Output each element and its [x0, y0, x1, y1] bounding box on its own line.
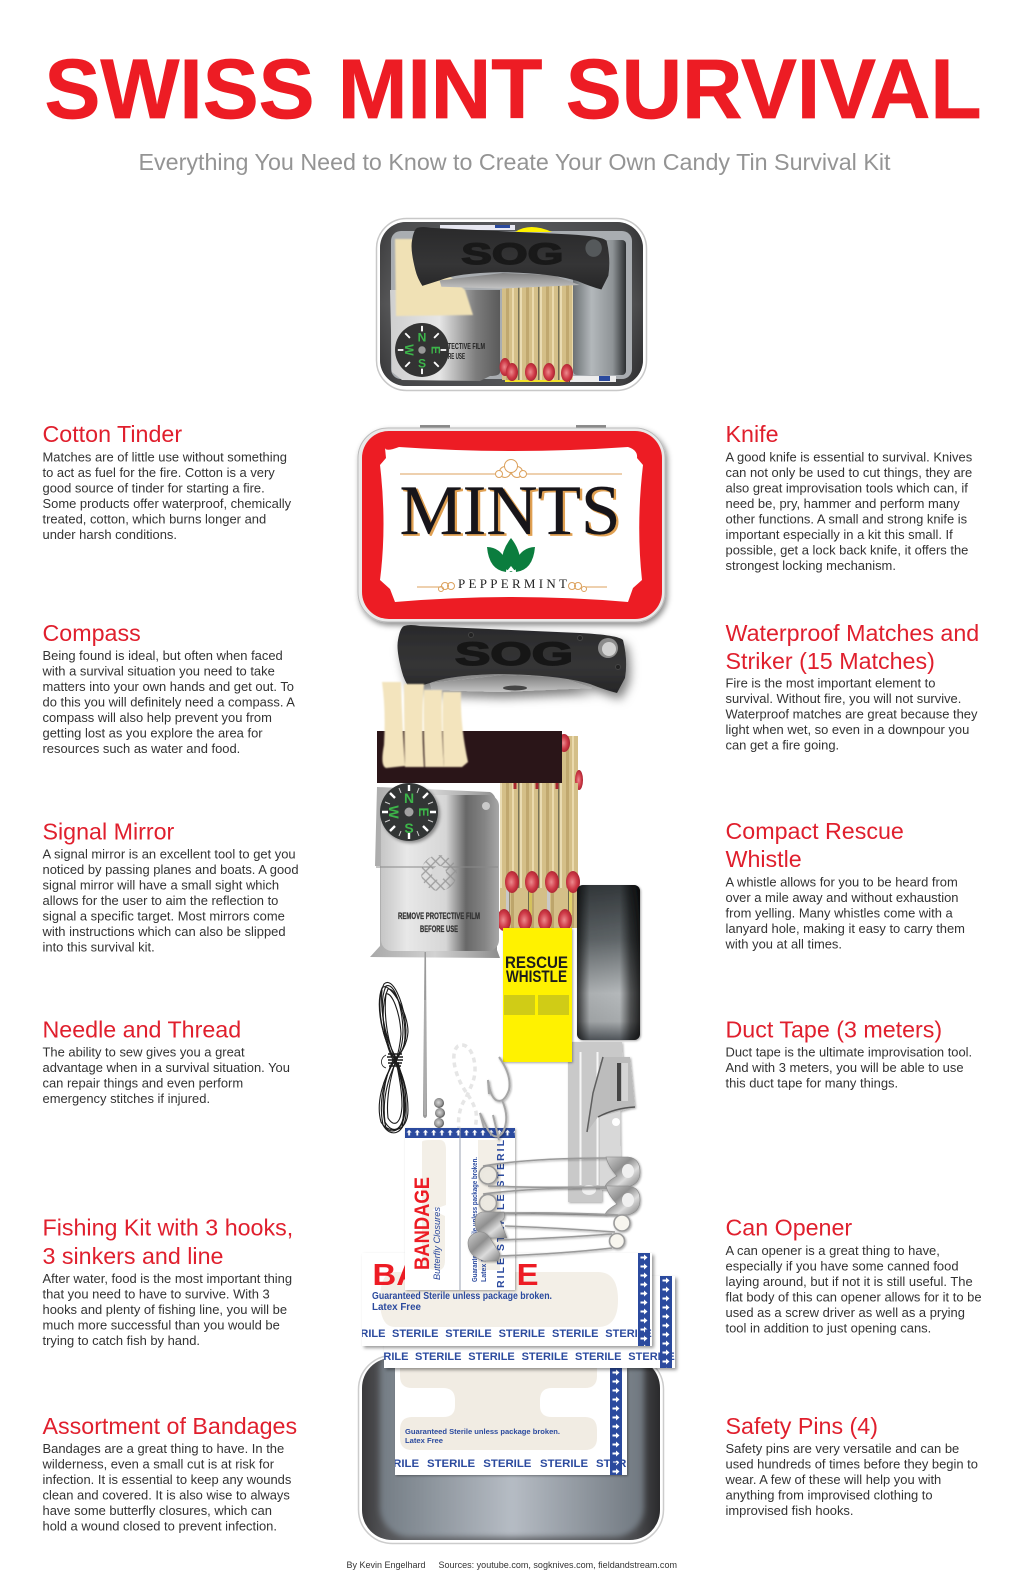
open tin packed with the kit: TECTIVE FILM: [448, 342, 485, 351]
peppermint label: PEPPERMINT: [458, 576, 567, 591]
section: can opener: used as a screw driver as well as a prying: [726, 1305, 965, 1320]
mint leaves: [487, 538, 535, 572]
compass: W: [386, 805, 402, 819]
pin 4: [468, 1232, 624, 1261]
section: knife: need be, pry, hammer and perform many: [726, 496, 960, 511]
second stacked bandage: STERILE: [575, 1351, 621, 1363]
section: signal mirror: A signal mirror is an excellent tool to get you: [42, 846, 296, 861]
section: compact rescue whistle: Whistle: [726, 846, 802, 872]
section: fishing kit: Fishing Kit with 3 hooks,: [42, 1215, 293, 1241]
pin 3: [475, 1212, 630, 1238]
section: cotton tinder: to act as fuel for the fire. Cotton is a very: [42, 465, 275, 480]
pin 1: [479, 1157, 640, 1187]
mints tin lid: [358, 425, 665, 622]
section: assortment of bandages: wilderness, even a small cut is at risk for: [42, 1456, 275, 1472]
section: assortment of bandages: clean and covered. It is also wise to always: [42, 1488, 290, 1502]
butterfly closure bandages, vertical: Guaranteed Sterile unless package broken.: [472, 1157, 479, 1282]
section: duct tape: Duct Tape (3 meters): [726, 1016, 942, 1042]
section: knife: other functions. A small and strong knife is: [726, 512, 967, 527]
section: waterproof matches: survival. Without fire, you will not survive.: [726, 691, 961, 706]
section: signal mirror: allows for the user to aim the reflection to: [42, 893, 278, 908]
section: waterproof matches: [726, 620, 979, 753]
footer credits: By Kevin Engelhard: [346, 1560, 426, 1571]
open folding knife: [398, 625, 626, 693]
section: signal mirror: [42, 818, 299, 954]
footer credits: Sources: youtube.com, sogknives.com, fieldandstream.com: [438, 1560, 677, 1571]
section: can opener: flat body of this can opener allows for it to be: [726, 1290, 982, 1304]
section: knife: can not only be used to cut things, they are: [726, 465, 972, 480]
open tin packed with the kit: S: [418, 357, 426, 371]
main horizontal bandage: STERILE: [339, 1328, 385, 1340]
title: SWISS MINT SURVIVAL: [44, 42, 982, 136]
section: compass: getting lost as you explore the area for: [42, 726, 263, 740]
sewing needle: [423, 952, 427, 1118]
section: compact rescue whistle: Compact Rescue: [726, 818, 904, 844]
section: safety pins: Safety pins are very versatile and can be: [726, 1441, 959, 1456]
section: assortment of bandages: Bandages are a great thing to have. In the: [42, 1441, 284, 1456]
section: assortment of bandages: Assortment of Bandages: [42, 1413, 297, 1439]
section: compact rescue whistle: with you at all times.: [724, 937, 842, 952]
footer credits: [346, 1560, 677, 1571]
section: cotton tinder: [42, 421, 292, 542]
open folding knife: SOG: [455, 636, 573, 672]
section: assortment of bandages: hold a wound closed to prevent infection.: [42, 1518, 277, 1534]
section: needle and thread: can repair things and even perform: [42, 1076, 243, 1091]
label: [380, 447, 643, 602]
main horizontal bandage: STERILE: [552, 1328, 598, 1340]
section: duct tape: And with 3 meters, you will be able to use: [726, 1060, 964, 1075]
brand name: MINTS: [400, 472, 620, 550]
section: needle and thread: advantage when in a survival situation. You: [42, 1060, 290, 1075]
butterfly closure bandages, vertical: BANDAGE: [411, 1177, 434, 1270]
main horizontal bandage: Guaranteed Sterile unless package broken.: [372, 1291, 552, 1302]
signal mirror: [370, 787, 500, 958]
compass: E: [416, 807, 432, 817]
section: cotton tinder: good source of tinder for starting a fire.: [42, 481, 265, 496]
bottom tin base: [358, 1340, 664, 1544]
black thread: [379, 982, 408, 1133]
compass: N: [404, 790, 414, 806]
open tin packed with the kit: [376, 218, 646, 390]
compass: [380, 783, 438, 841]
bandage lying in tin: [395, 1368, 629, 1477]
section: compact rescue whistle: over a mile away and without exhaustion: [726, 890, 959, 905]
bandage lying in tin: STERILE: [427, 1458, 476, 1470]
second stacked bandage: [362, 1276, 675, 1368]
section: needle and thread: Needle and Thread: [42, 1016, 241, 1042]
section: compass: do this you will definitely need a compass. A: [42, 694, 295, 710]
section: compact rescue whistle: lanyard hole, making it easy to carry them: [726, 921, 965, 936]
waterproof matches and striker: [377, 731, 583, 931]
section: safety pins: [724, 1413, 978, 1518]
section: fishing kit: 3 sinkers and line: [42, 1243, 223, 1269]
section: fishing kit: that you need to have to survive. With 3: [42, 1286, 270, 1302]
top scroll ornament: [400, 460, 622, 478]
section: knife: Knife: [726, 421, 778, 447]
main horizontal bandage: Latex Free: [372, 1302, 422, 1313]
rescue whistle: [503, 928, 572, 1062]
bandage lying in tin: STERILE: [540, 1458, 589, 1470]
section: fishing kit: After water, food is the most important thing: [42, 1271, 292, 1286]
section: duct tape: Duct tape is the ultimate improvisation tool.: [726, 1045, 972, 1060]
butterfly closure bandages, vertical: [405, 1128, 515, 1290]
second stacked bandage: STERILE: [628, 1351, 675, 1363]
section: cotton tinder: Matches are of little use without something: [42, 450, 287, 465]
section: assortment of bandages: [42, 1413, 297, 1534]
section: can opener: especially if you have some canned food: [726, 1258, 959, 1274]
section: can opener: A can opener is a great thing to have,: [726, 1243, 940, 1258]
section: knife: [726, 421, 972, 573]
butterfly closure bandages, vertical: Latex Free: [481, 1247, 488, 1282]
rescue whistle: RESCUE: [505, 954, 568, 972]
main horizontal bandage: STERILE: [392, 1328, 438, 1340]
brand name: MINTS: [402, 474, 622, 552]
section: knife: possible, get a lock back knife, it offers the: [726, 543, 968, 558]
signal mirror: BEFORE USE: [420, 924, 458, 934]
section: can opener: laying around, but if not it is still useful. The: [726, 1274, 973, 1289]
cotton tinder: [382, 682, 468, 768]
section: safety pins: used hundreds of times before they begin to: [726, 1456, 978, 1472]
open tin packed with the kit: RE USE: [448, 352, 465, 361]
main horizontal bandage: [339, 1253, 652, 1346]
section: safety pins: wear. A few of these will help you with: [724, 1472, 941, 1487]
section: needle and thread: The ability to sew gives you a great: [42, 1045, 245, 1060]
section: waterproof matches: Fire is the most important element to: [726, 676, 935, 691]
section: waterproof matches: Waterproof Matches and: [726, 620, 979, 646]
fishing line coil: [454, 1045, 476, 1140]
compass: S: [404, 820, 414, 836]
rescue whistle: WHISTLE: [506, 968, 567, 986]
section: assortment of bandages: infection. It is essential to keep any wounds: [42, 1472, 291, 1487]
bandage lying in tin: Guaranteed Sterile unless package broken.: [405, 1427, 560, 1436]
section: can opener: [726, 1215, 982, 1336]
safety pins: [468, 1157, 640, 1261]
pin 2: [480, 1186, 640, 1215]
section: signal mirror: into this survival kit.: [42, 939, 155, 954]
section: signal mirror: noticed by passing planes and boats. A good: [42, 862, 299, 877]
bandage lying in tin: STERILE: [596, 1458, 645, 1470]
duct tape roll: [577, 885, 640, 1040]
section: compact rescue whistle: A whistle allows for you to be heard from: [726, 875, 958, 890]
section: fishing kit: hooks and plenty of fishing line, you will be: [42, 1302, 287, 1317]
section: safety pins: improvised fish hooks.: [726, 1503, 854, 1518]
fishing sinkers: [434, 1098, 445, 1128]
main horizontal bandage: STERILE: [445, 1328, 492, 1340]
section: can opener: Can Opener: [726, 1215, 852, 1241]
main horizontal bandage: STERILE: [499, 1328, 545, 1340]
second stacked bandage: STERILE: [522, 1351, 568, 1363]
fishing hooks: [480, 1057, 510, 1140]
section: can opener: tool in addition to just opening cans.: [726, 1320, 931, 1336]
section: waterproof matches: light when wet, so even in a downpour you: [726, 722, 969, 737]
section: needle and thread: [42, 1016, 290, 1106]
section: waterproof matches: can get a fire going.: [726, 738, 839, 753]
section: fishing kit: much more successful than you would be: [42, 1318, 280, 1332]
section: knife: A good knife is essential to survival. Knives: [726, 450, 972, 465]
butterfly closure bandages, vertical: RILE STERILE STERIL: [495, 1139, 507, 1288]
section: signal mirror: Signal Mirror: [42, 818, 175, 844]
section: signal mirror: signal mirror will have a small sight which: [42, 877, 279, 892]
section: compact rescue whistle: from yelling. Many whistles come with a: [726, 906, 954, 921]
section: assortment of bandages: have some butterfly closures, which can: [42, 1503, 272, 1518]
subtitle: Everything You Need to Know to Create Your Own Candy Tin Survival Kit: [138, 149, 891, 175]
second stacked bandage: STERILE: [362, 1351, 408, 1363]
section: signal mirror: signal a specific target. Most mirrors come: [42, 908, 285, 923]
section: safety pins: anything from improvised clothing to: [726, 1488, 933, 1502]
can opener: [568, 1042, 635, 1202]
section: needle and thread: emergency stitches if injured.: [42, 1091, 210, 1106]
section: duct tape: [726, 1016, 972, 1091]
open tin packed with the kit: SOG: [461, 238, 563, 271]
signal mirror: REMOVE PROTECTIVE FILM: [398, 911, 480, 921]
section: cotton tinder: Cotton Tinder: [42, 421, 182, 447]
second stacked bandage: STERILE: [415, 1351, 461, 1363]
section: compass: [42, 620, 295, 756]
section: safety pins: Safety Pins (4): [726, 1413, 878, 1439]
main horizontal bandage: BANDAGE: [372, 1257, 538, 1292]
section: knife: important especially in a kit this small. If: [726, 527, 953, 542]
second stacked bandage: STERILE: [468, 1351, 515, 1363]
section: signal mirror: with instructions which can also be slipped: [42, 924, 286, 939]
open tin packed with the kit: W: [402, 344, 416, 356]
section: compass: with a survival situation you need to take: [42, 664, 275, 678]
section: knife: strongest locking mechanism.: [726, 558, 896, 573]
section: duct tape: this duct tape for many things.: [726, 1076, 898, 1091]
section: compass: compass will also help prevent you from: [42, 710, 272, 725]
section: fishing kit: trying to catch fish by hand.: [42, 1333, 200, 1348]
section: cotton tinder: treated, cotton, which burns longer and: [42, 512, 266, 527]
butterfly closure bandages, vertical: Butterfly Closures: [432, 1207, 443, 1280]
section: compact rescue whistle: [724, 818, 965, 952]
main horizontal bandage: STERILE: [605, 1328, 652, 1340]
section: fishing kit: [42, 1215, 293, 1348]
section: waterproof matches: Waterproof matches are great because they: [726, 707, 978, 722]
bandage lying in tin: Latex Free: [405, 1436, 443, 1445]
section: compass: Compass: [42, 620, 141, 646]
section: cotton tinder: Some products offer waterproof, chemically: [42, 496, 292, 511]
section: compass: matters into your own hands and get out. To: [42, 679, 294, 694]
section: knife: also great improvisation tools which can, if: [726, 481, 968, 496]
section: cotton tinder: under harsh conditions.: [42, 527, 177, 542]
open tin packed with the kit: N: [418, 331, 426, 345]
open tin packed with the kit: E: [428, 346, 442, 354]
section: compass: Being found is ideal, but often when faced: [42, 648, 283, 663]
bandage lying in tin: STERILE: [371, 1458, 420, 1470]
bandage lying in tin: STERILE: [483, 1458, 532, 1470]
section: waterproof matches: Striker (15 Matches): [726, 648, 935, 674]
section: compass: resources such as water and food.: [42, 741, 240, 756]
